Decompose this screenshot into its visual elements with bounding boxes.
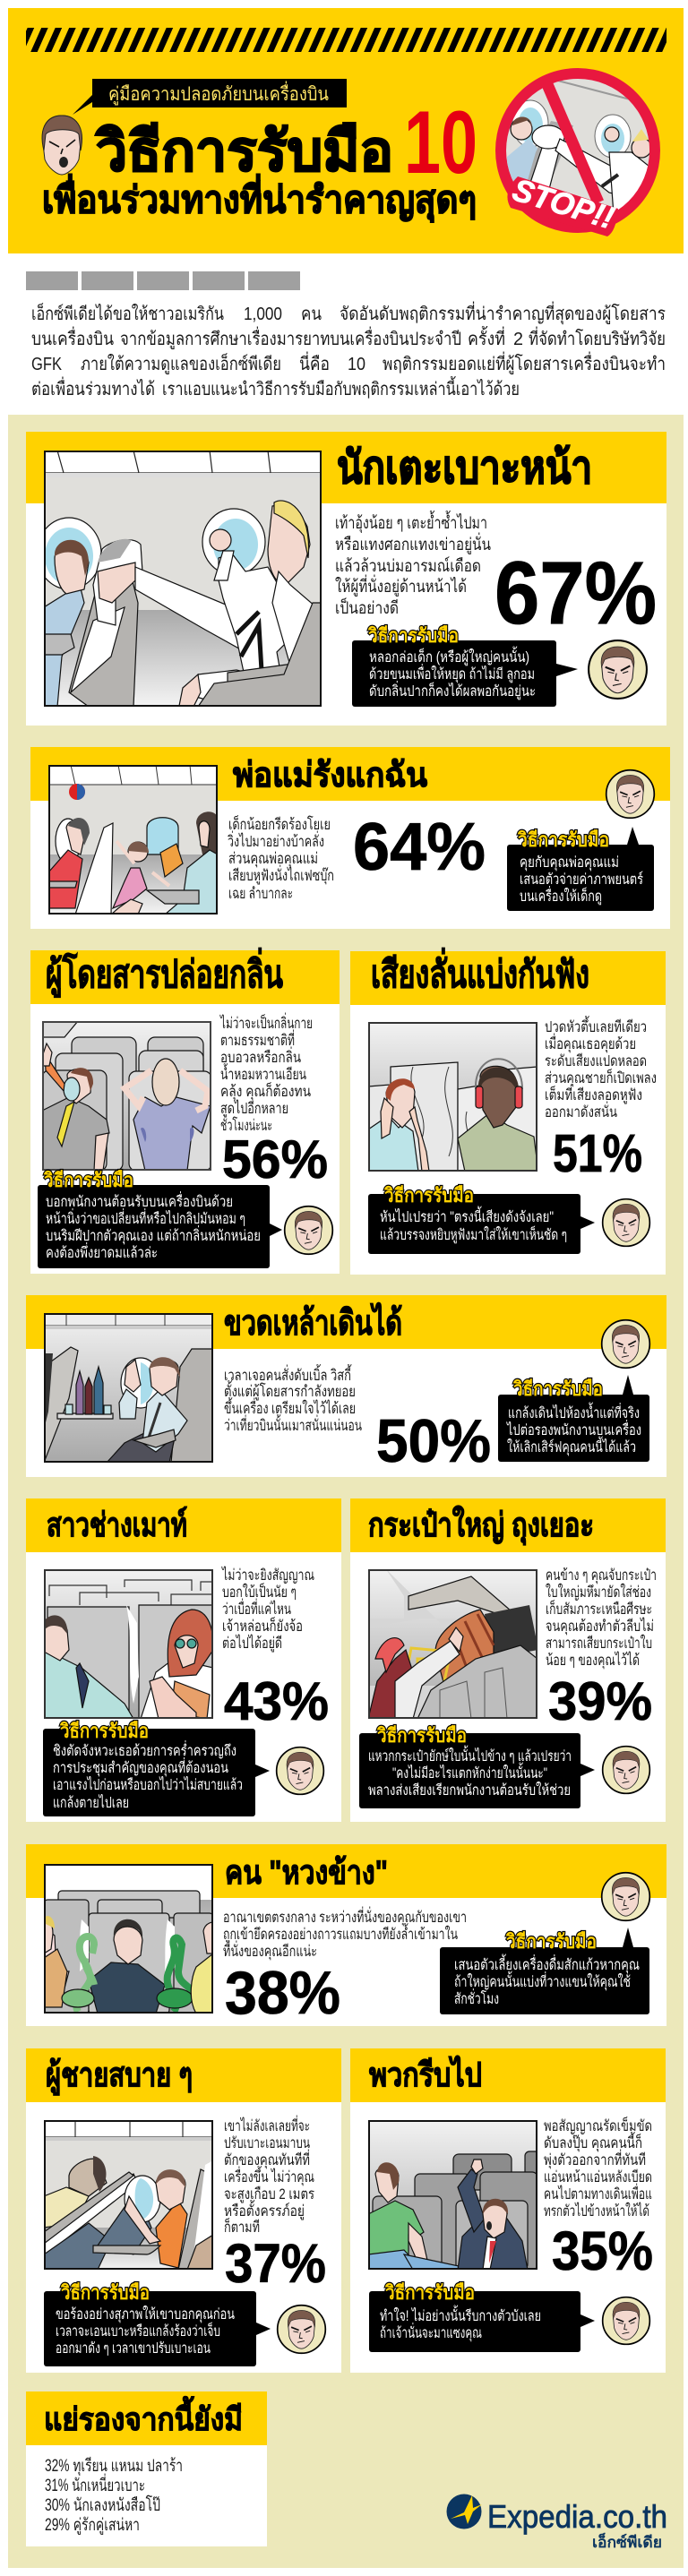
tip callout: หันไปเปรยว่า "ตรงนี้เสียงดังจังเลย" [380,1206,554,1225]
description: เครื่องขึ้น ไม่ว่าคุณ [224,2166,314,2186]
description: วิ่งไปมาอย่างบ้าคลั่ง [228,830,324,850]
tip callout: แกล้งเดินไปห้องน้ำแต่ที่จริง [508,1402,640,1421]
tip callout: แหวกกระเป๋ายักษ์ใบนั้นไปข้าง ๆ แล้วเปรยว่า [368,1745,572,1765]
list [45,2456,183,2535]
illustration: reclining seat [44,2120,213,2270]
panel: runners-up list [26,2391,267,2546]
tip callout: วิธีการรับมือ [376,1724,467,1747]
description: ตักของคุณทันทีที่ [224,2149,310,2169]
tip callout [352,624,578,707]
statistic: 67%: 67% [494,543,657,642]
panel: loud music 51% [350,948,666,1275]
description [224,2115,314,2236]
tip callout: หน้านิ่งว่าขอเปลี่ยนที่หรือไปกลิปมันหอม ๆ [46,1208,245,1227]
description: เสียบหูฟังนั่งไถเฟซบุ๊ก [228,864,334,885]
tip callout: วิธีการรับมือ [512,1378,603,1400]
tip callout: ไปต่อรองพนักงานบนเครื่อง [505,1420,641,1438]
statistic: 37%: 37% [225,2233,326,2294]
description: เด็กน้อยกรีดร้องโยเย [228,814,331,833]
illustration: drinking man [44,1313,213,1463]
statistic: 35%: 35% [552,2220,653,2281]
tip callout: วิธีการรับมือ [384,2281,475,2304]
tip callout: เอาแรงไปก่อนหรือบอกไปว่าไม่สบายแล้ว [53,1776,243,1793]
tip callout: ถ้าใหญ่คนนั้นแบ่งที่วางแขนให้คุณใช้ [454,1971,631,1991]
tip callout [359,1724,595,1808]
description: จนคุณต้องทำตัวลีบไม่ [546,1617,654,1636]
panel: recliner 37% [26,2048,341,2373]
illustration: chatty woman [44,1569,213,1719]
icon: face [278,2306,325,2353]
panel: smelly passenger 56% [30,948,340,1274]
intro text: คน [301,305,322,324]
list: 32% ทุเรียน แหนม ปลาร้า [45,2456,183,2477]
heading: นักเตะเบาะหน้า [337,442,592,493]
tip callout: พลางส่งเสียงเรียกพนักงานต้อนรับให้ช่วย [368,1782,571,1799]
icon: face [277,1747,323,1794]
icon: face [603,1747,649,1793]
tip callout: บนเครื่องให้เด็กดู [520,886,602,906]
intro text: เอ็กซ์พีเดียได้ขอให้ชาวอเมริกัน [31,302,224,324]
heading: ขวดเหล้าเดินได้ [224,1302,402,1343]
tip callout [43,1720,270,1816]
description: ตั้งแต่ผู้โดยสารกำลังทยอย [224,1380,356,1401]
description: ก็ตามที [224,2217,260,2236]
tip callout: เสนอตัวเลี้ยงเครื่องดื่มสักแก้วหากคุณ [454,1953,640,1974]
icon: face [602,1320,649,1368]
description: ต่อไปได้อยู่ดี [222,1634,282,1653]
description: ปรับเบาะเอนมาบน [224,2134,310,2151]
description: ว่าเที่ยวบินนั้นเมาสนั่นแน่นอน [224,1414,362,1434]
heading: สาวช่างเมาท์ [47,1507,187,1543]
description [223,1906,467,1961]
description: ปวดหัวตึ้บเลยทีเดียว [545,1016,647,1035]
icon: stop sign [495,68,660,236]
list: 29% คู่รักคู่เสน่หา [45,2516,140,2535]
heading: ผู้โดยสารปล่อยกลิ่น [46,948,283,998]
icon: face [603,1199,649,1246]
description: หรือแทงศอกแทงเข่าอยู่นั่น [335,532,491,554]
tip callout: วิธีการรับมือ [383,1184,474,1206]
description [546,1567,657,1670]
tip callout: บนริมฝีปากตัวคุณเอง แต่ถ้ากลิ่นหนักหน่อย [46,1225,261,1245]
intro text: ที่จัดทำโดยบริษัทวิจัย [529,326,666,349]
description: เป็นอย่างดี [335,597,399,618]
tip callout: เวลาจะเอนเบาะหรือแกล้งร้องว่าเจ็บ [56,2322,220,2340]
icon: face [602,1873,649,1920]
description: เต็มที่เสียงลอดหูฟัง [545,1084,642,1104]
intro text: ต่อเพื่อนร่วมทางได้ [31,376,155,399]
tip callout: ให้เลิกเสิร์ฟคุณคนนี้ได้แล้ว [507,1436,636,1456]
description: หรือตั้งครรภ์อยู่ [224,2200,305,2220]
intro text [31,301,666,399]
heading: ผู้ชายสบาย ๆ [46,2057,193,2096]
icon: face [589,640,647,699]
statistic: 39%: 39% [548,1671,652,1731]
tip callout: หลอกล่อเด็ก (หรือผู้ใหญ่คนนั้น) [369,646,529,666]
description: เฉย ลำบากละ [228,885,293,902]
description: ถูกเข้ายึดครองอย่างถาวรแถมบางทียังล้ำเข้ามาใน [223,1923,458,1944]
description: เท้าอุ้งน้อย ๆ เตะย้ำซ้ำไปมา [335,511,487,534]
description: อบอวลหรือกลิ่น [220,1046,301,1066]
description: อาณาเขตตรงกลาง ระหว่างที่นั่งของคุณกับของเขา [223,1906,467,1927]
statistic: 51%: 51% [553,1124,642,1183]
description: บอกใบ้เป็นนัย ๆ [222,1582,297,1601]
description: ระดับเสียงแปดหลอด [545,1052,647,1069]
panel: seat kicker 67% [26,432,666,726]
tip callout: คุยกับคุณพ่อคุณแม่ [520,854,619,872]
description: แอ่นหน้าแอ่นหลังเบียด [544,2168,652,2185]
tip callout: ออกมาดัง ๆ เวลาเขาปรับเบาะเอน [56,2340,211,2357]
tip callout: แกล้งตายไปเลย [53,1794,129,1811]
description: เมื่อคุณเธอคุยด้วย [545,1033,636,1053]
speech bubble: subtitle [73,79,347,115]
description: จะสูงเกือบ 2 เมตร [224,2185,314,2203]
tip callout: วิธีการรับมือ [505,1930,597,1953]
panel: rushing passenger 35% [350,2048,666,2373]
illustration: kid kicking seat [37,451,322,710]
tip callout [440,1928,649,2014]
description: น้ำหอมหวานเอียน [220,1063,306,1083]
intro text: ครั้งที่ [468,326,505,349]
tip callout: วิธีการรับมือ [60,2281,150,2304]
intro text: จากข้อมูลการศึกษาเรื่องมารยาทบนเครื่องบินประจำปี [120,326,461,350]
logo: Expedia: Expedia.co.th [487,2498,667,2535]
icon: face [285,1206,332,1254]
description: ส่วนคุณพ่อคุณแม่ [228,850,318,868]
description: ชั่วโมงน่ะนะ [220,1114,272,1134]
intro text: เราแอบแนะนำวิธีการรับมือกับพฤติกรรมเหล่านี้เอาไว้ด้วย [162,376,520,399]
tip callout: การประชุมสำคัญของคุณที่ต้องนอน [53,1757,228,1777]
description [228,814,334,902]
heading: พ่อแม่รังแกฉัน [233,757,427,794]
panel: big luggage 39% [350,1498,666,1822]
intro text: 2 [513,330,523,349]
panel: walking bottle 50% [26,1295,666,1477]
tip callout: ดับกลิ่นปากก็คงได้ผลพอกันอยู่นะ [369,681,536,700]
description: คลุ้ง คุณก็ต้องทน [220,1081,311,1101]
icon: face [603,2297,649,2344]
heading: เสียงลั่นแบ่งกันฟัง [371,948,589,995]
description: สูดไปอีกหลาย [220,1099,288,1118]
illustration: rushing man [368,2120,538,2270]
panel: header [8,8,684,253]
statistic: 56%: 56% [222,1129,328,1189]
background: beige page panel continued [8,777,684,2568]
description: ตามธรรมชาติที่ [220,1029,295,1049]
list: 30% นักเลงหนังสือโป๊ [45,2494,160,2515]
description [544,2116,652,2220]
heading: คน "หวงข้าง" [225,1854,388,1891]
title: line 2: เพื่อนร่วมทางที่น่ารำคาญสุดๆ [42,174,477,223]
panel: armrest hog 38% [26,1844,666,2027]
description: แล้วล้วนบ่มอารมณ์เดือด [335,556,481,576]
description [335,511,491,618]
tip callout [44,2281,271,2366]
title: line 1: วิธีการรับมือ [95,121,393,183]
tip callout: "คงไม่มีอะไรแตกหักง่ายในนั้นนะ" [392,1762,547,1782]
statistic: 38%: 38% [225,1959,340,2027]
tip callout: ขอร้องอย่างสุภาพให้เขาบอกคุณก่อน [56,2306,235,2323]
description: ดับลงปุ๊บ คุณคนนี้ก็ [544,2132,642,2152]
icon: face [606,770,654,818]
tip callout: บอกพนักงานต้อนรับบนเครื่องบินด้วย [46,1191,233,1210]
tip callout [38,1169,282,1268]
background: beige page panel [8,415,684,777]
logo: Expedia: เอ็กซ์พีเดีย [592,2531,662,2551]
title: number 10: 10 [404,92,477,192]
intro text: 1,000 [244,305,282,324]
description [219,1012,313,1134]
tip callout: ทำใจ! ไม่อย่างนั้นรีบกางตัวบังเลย [380,2305,541,2324]
intro text: GFK [31,355,63,374]
tip callout: ถ้าเจ้านั่นจะมาแซงคุณ [380,2323,482,2342]
speech bubble: subtitle: คู่มือความปลอดภัยบนเครื่องบิน [108,81,329,106]
tip callout [498,1375,649,1462]
heading: แย่รองจากนี้ยังมี [44,2396,243,2437]
tip callout: ชิงตัดจังหวะเธอด้วยการคร่ำครวญถึง [53,1740,236,1759]
description: ว่าเบื่อที่แค่ไหน [222,1598,291,1618]
tip callout: วิธีการรับมือ [59,1720,149,1742]
description: ให้ผู้ที่นั่งอยู่ด้านหน้าได้ [335,574,467,597]
tip callout: แล้วบรรจงหยิบหูฟังมาใส่ให้เขาเห็นชัด ๆ [380,1225,567,1244]
illustration: noisy kid [48,765,218,914]
statistic: 43%: 43% [224,1671,329,1731]
tip callout [507,827,654,911]
intro text: บนเครื่องบิน [31,326,114,349]
list: 31% นักเหนี่ยวเบาะ [45,2473,145,2495]
statistic: 50%: 50% [376,1407,491,1475]
tip callout [369,2281,595,2352]
tip callout: คงต้องพึ่งยาดมแล้วล่ะ [46,1242,158,1261]
description: เจ้าหล่อนก็ยังจ้อ [222,1616,303,1635]
tip callout: วิธีการรับมือ [43,1169,133,1191]
intro text: นี่คือ [299,351,330,374]
description: ที่นั่งของคุณอีกแน่ะ [223,1940,317,1961]
description [224,1364,362,1434]
tip callout: สักชั่วโมง [454,1988,499,2007]
description: พอสัญญาณรัดเข็มขัด [544,2116,652,2134]
illustration: headphones [368,1022,538,1172]
icon: angry man head [42,116,82,175]
illustration: snake arms [44,1864,213,2014]
description [221,1566,314,1653]
logo: Expedia [446,2494,667,2551]
panel: pushover parents 64% [30,747,670,929]
illustration: huge trunk [368,1569,538,1719]
tip callout [368,1184,595,1254]
description: ส่วนคุณชายก็เปิดเพลง [545,1068,657,1087]
description: ขึ้นเครื่อง เตรียมใจไว้ได้เลย [224,1397,356,1417]
description: พุ่งตัวออกจากที่ทันที [544,2149,646,2169]
hazard stripes [26,28,666,52]
illustration: bad smell [42,1021,211,1171]
heading: พวกรีบไป [369,2055,482,2093]
gray tag bar [26,271,300,290]
tip callout: ด้วยขนมเพื่อให้หยุด ถ้าไม่มี ลูกอม [369,664,535,683]
statistic: 64%: 64% [353,809,486,884]
tip callout: เสนอตัวจ่ายค่าภาพยนตร์ [520,871,643,888]
description: น้อย ๆ ของคุณไว้ได้ [546,1651,640,1670]
intro text: 10 [348,355,366,374]
intro text: ภายใต้ความดูแลของเอ็กซ์พีเดีย [81,352,281,375]
description: ไม่ว่าจะเป็นกลิ่นกาย [219,1012,313,1032]
description: ไม่ว่าจะยิงสัญญาณ [221,1566,314,1584]
panel: intro [26,271,666,399]
heading: กระเป๋าใหญ่ ถุงเยอะ [368,1505,594,1546]
description: เขาไม่ลังเลเลยที่จะ [224,2115,310,2134]
description [545,1016,657,1121]
panel: chatty woman 43% [26,1498,341,1822]
tip callout: วิธีการรับมือ [517,829,609,851]
tip callout: วิธีการรับมือ [367,624,459,647]
description: ออกมาดังสนั่น [545,1101,617,1121]
icon: stop sign: STOP!! [509,172,618,236]
description: เวลาเจอคนสั่งดับเบิ้ล วิสกี้ [224,1364,352,1384]
